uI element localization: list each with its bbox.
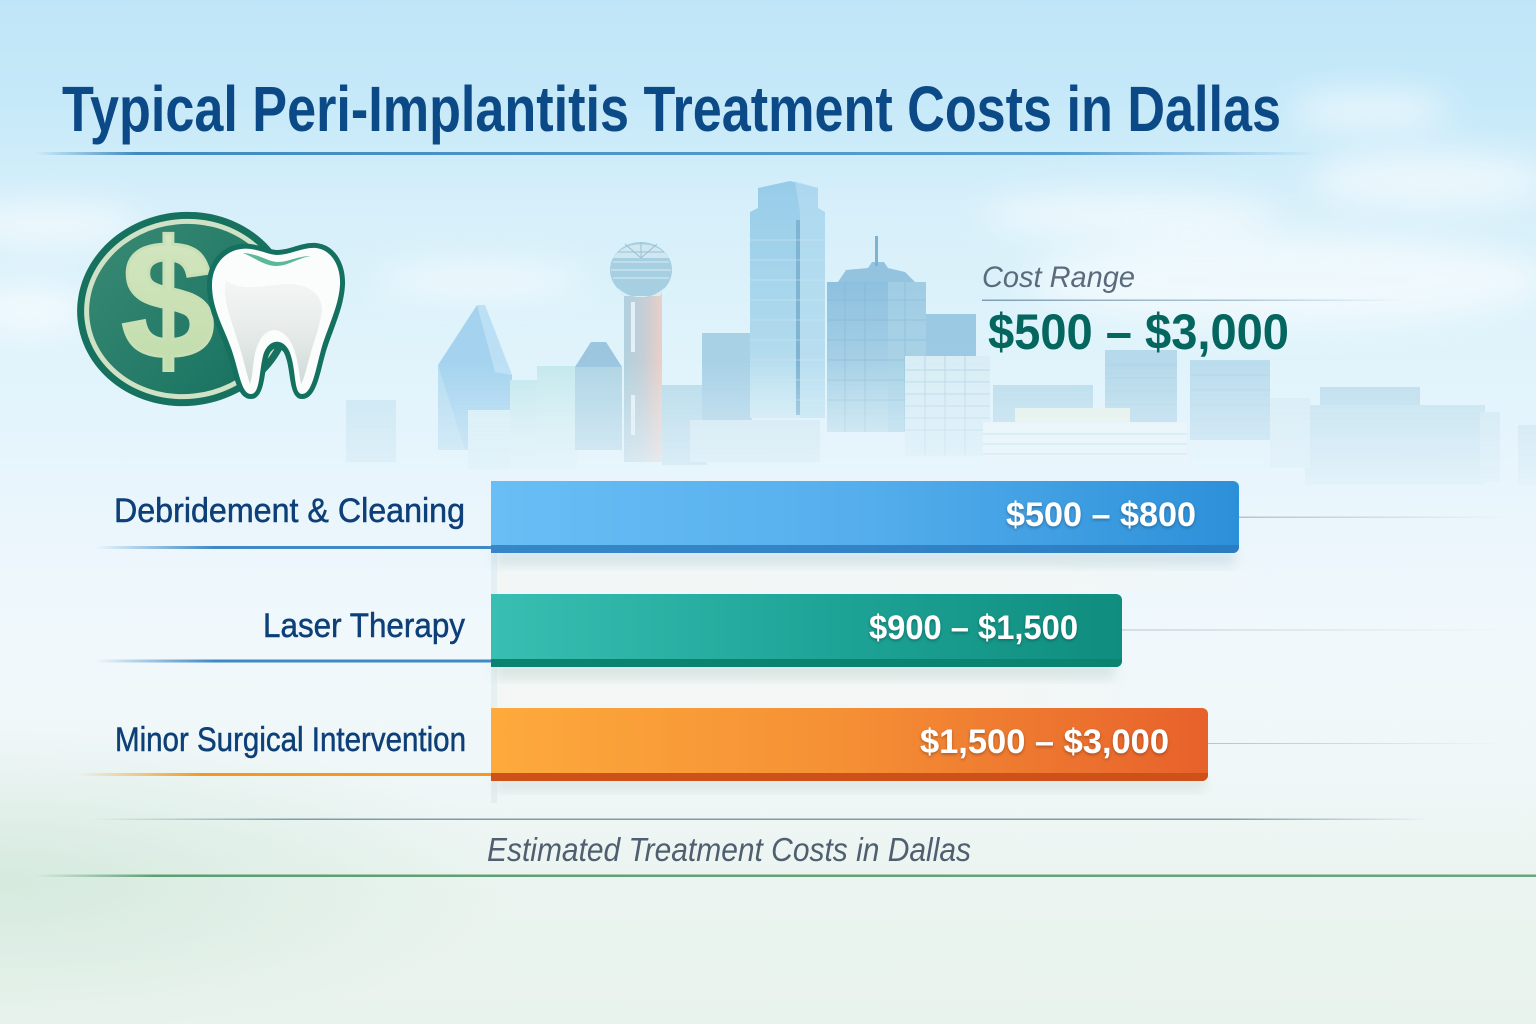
bar row: laser therapy: [95, 594, 1512, 678]
bar row: debridement and cleaning: Debridement & Cleaning: [114, 492, 465, 530]
low teal blocks: [510, 380, 537, 450]
footer green rule: [35, 874, 1536, 877]
icon: dollar coin: [67, 201, 303, 417]
base blocks: [690, 420, 820, 462]
bar chart: [78, 481, 1512, 790]
title: Typical Peri-Implantitis Treatment Costs in Dallas: [62, 73, 1281, 145]
bar row: debridement and cleaning: $500 – $800: [1006, 496, 1196, 534]
octagonal roof tower: [575, 342, 622, 450]
bar row: minor surgical intervention: Minor Surgical Intervention: [115, 721, 466, 759]
light office block: [905, 356, 990, 456]
bar row: minor surgical intervention: $1,500 – $3,000: [920, 723, 1169, 761]
title underline: [35, 152, 1320, 155]
bar row: debridement and cleaning: [95, 481, 1509, 565]
bar row: minor surgical intervention: [78, 708, 1508, 790]
low white building: [983, 408, 1187, 454]
bar row: laser therapy: Laser Therapy: [263, 607, 465, 645]
icon: dollar coin: $: [121, 206, 215, 394]
Reunion Tower: [610, 242, 672, 462]
icon: tooth: [207, 243, 345, 399]
tower with antenna: [827, 236, 926, 432]
footer rule: [90, 818, 1430, 820]
cost range value: $500 – $3,000: [988, 304, 1289, 360]
small dark block: [926, 314, 976, 356]
background clouds: [0, 90, 1536, 336]
Bank of America Plaza: [750, 181, 825, 418]
mid-rise blocks: [662, 385, 707, 465]
icon: dollar coin and tooth: [67, 201, 345, 417]
cost range label: Cost Range: [982, 261, 1135, 294]
right-hand far buildings: [993, 350, 1536, 485]
bar row: laser therapy: $900 – $1,500: [869, 609, 1078, 647]
skyline of Dallas: [346, 181, 1536, 485]
chart background bands: [491, 553, 1297, 803]
far left building: [346, 400, 396, 462]
cost range callout: [982, 261, 1402, 360]
footer caption: Estimated Treatment Costs in Dallas: [487, 831, 971, 868]
Fountain Place tower: [438, 305, 512, 450]
